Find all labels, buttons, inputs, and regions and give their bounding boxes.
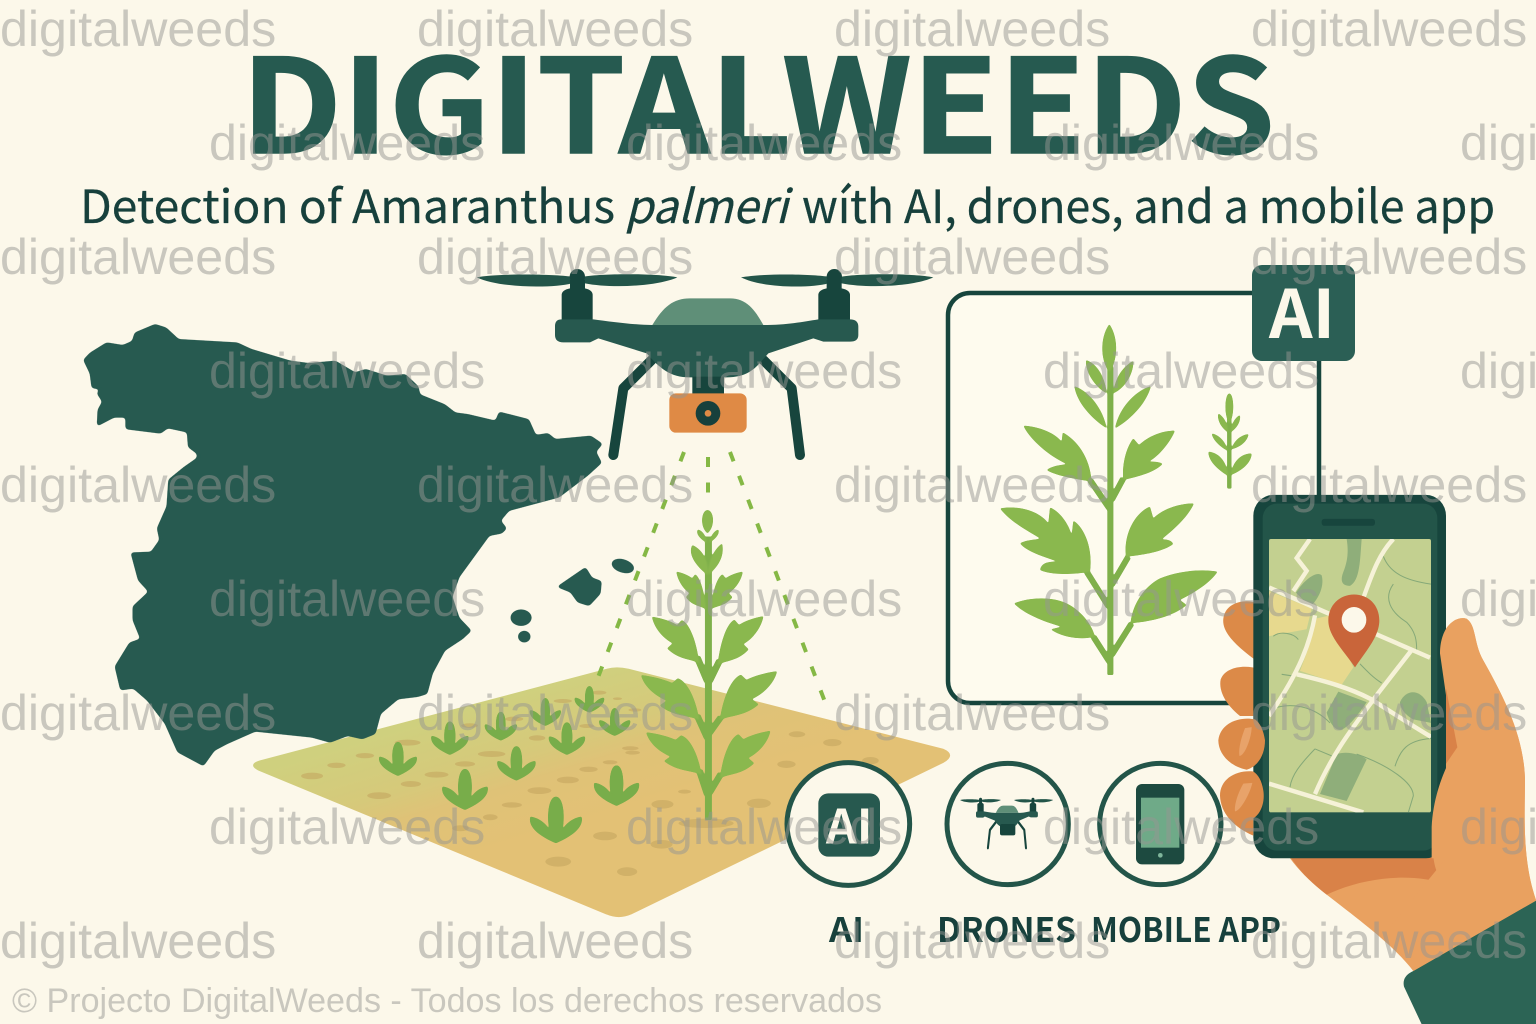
watermark grid: digitalweeds — [1251, 1, 1527, 57]
title: DIGITALWEEDS — [241, 3, 1275, 191]
watermark grid: digitalweeds — [1043, 343, 1319, 399]
map of Spain — [84, 325, 635, 765]
lower leaves — [646, 732, 701, 775]
copyright footer: © Projecto DigitalWeeds - Todos los derechos reservados — [12, 982, 882, 1020]
watermark grid: digitalweeds — [209, 115, 485, 171]
Formentera — [519, 632, 530, 642]
soil plot — [255, 669, 948, 916]
hand holding phone — [1218, 495, 1536, 1024]
watermark grid: digitalweeds — [834, 457, 1110, 513]
watermark grid: digitalweeds — [834, 685, 1110, 741]
icon: drone circle — [947, 763, 1068, 885]
watermark grid: digitalweeds — [417, 457, 693, 513]
speaker — [1322, 519, 1375, 526]
watermark grid: digitalweeds — [1251, 913, 1527, 969]
AI chip — [818, 793, 880, 857]
Menorca — [611, 557, 635, 575]
phone body — [1253, 495, 1446, 858]
Mallorca — [559, 568, 601, 605]
AI detection panel — [948, 261, 1355, 703]
watermark grid: digitalweeds — [626, 343, 902, 399]
watermark grid: digitalweeds — [209, 343, 485, 399]
panel frame — [948, 293, 1319, 703]
watermark grid: digitalweeds — [0, 913, 276, 969]
watermark grid: digitalweeds — [1043, 571, 1319, 627]
lower fingers — [1218, 719, 1265, 770]
watermark grid: digitalweeds — [417, 229, 693, 285]
top bud — [702, 510, 713, 533]
watermark grid: digitalweeds — [1043, 799, 1319, 855]
watermark grid: digitalweeds — [417, 913, 693, 969]
AI chip text: AI — [825, 788, 873, 857]
drone — [477, 269, 933, 455]
mini drone — [960, 798, 1053, 848]
watermark grid: digitalweeds — [834, 229, 1110, 285]
watermark grid: digitalweeds — [1043, 115, 1319, 171]
watermark grid: digitalweeds — [1251, 685, 1527, 741]
watermark grid: digitalweeds — [834, 913, 1110, 969]
watermark grid: digitalweeds — [417, 685, 693, 741]
small weed — [1208, 393, 1252, 489]
AI badge — [1252, 265, 1355, 361]
label: drones: DRONES — [937, 903, 1076, 952]
mini phone button — [1158, 853, 1163, 858]
watermark grid: digitalweeds — [834, 1, 1110, 57]
index fingers — [1223, 601, 1258, 662]
mini camera — [1000, 824, 1015, 835]
watermark grid: digitalweeds — [1251, 457, 1527, 513]
watermark grid: digitalweeds — [0, 685, 276, 741]
watermark grid: digitalweeds — [626, 571, 902, 627]
thumb over phone — [1387, 618, 1536, 971]
middle leaves — [652, 617, 699, 663]
camera — [669, 393, 747, 433]
icon: AI circle — [787, 763, 910, 885]
icon: phone circle — [1100, 763, 1221, 885]
location pin — [1328, 595, 1379, 667]
label: AI: AI — [828, 903, 864, 952]
subtitle: Detection of Amaranthus — [80, 171, 615, 237]
mini phone screen — [1141, 798, 1179, 848]
AI badge text: AI — [1268, 261, 1335, 358]
drone scan beams — [597, 452, 825, 702]
map screen — [1269, 539, 1431, 812]
camera lens — [696, 401, 720, 426]
watermark grid: digitalweeds — [0, 457, 276, 513]
seedlings — [379, 686, 639, 843]
main weed plant — [641, 510, 777, 820]
detected weed — [1000, 324, 1218, 675]
subtitle — [80, 171, 1495, 237]
watermark grid: digitalweeds — [209, 799, 485, 855]
watermark grid: digitalweeds — [626, 799, 902, 855]
subtitle: wíth AI, drones, and a mobile app — [802, 171, 1495, 237]
palm shadow — [1290, 856, 1447, 895]
mini phone — [1136, 784, 1184, 864]
watermark grid: digitalweeds — [0, 1, 276, 57]
sleeve — [1404, 901, 1536, 1024]
Ibiza — [511, 610, 531, 625]
upper leaves — [691, 545, 708, 575]
palm — [1290, 618, 1536, 971]
label: mobile app: MOBILE APP — [1091, 903, 1281, 952]
watermark grid: digitalweeds — [1251, 229, 1527, 285]
subtitle: palmeri — [625, 171, 793, 237]
watermark grid: digitalweeds — [0, 229, 276, 285]
stem and branches — [697, 537, 721, 820]
field with seedlings — [255, 669, 948, 916]
watermark grid: digitalweeds — [626, 115, 902, 171]
thumb shadow — [1446, 688, 1457, 764]
mainland — [84, 325, 601, 765]
watermark grid: digitalweeds — [417, 1, 693, 57]
watermark grid: digitalweeds — [209, 571, 485, 627]
